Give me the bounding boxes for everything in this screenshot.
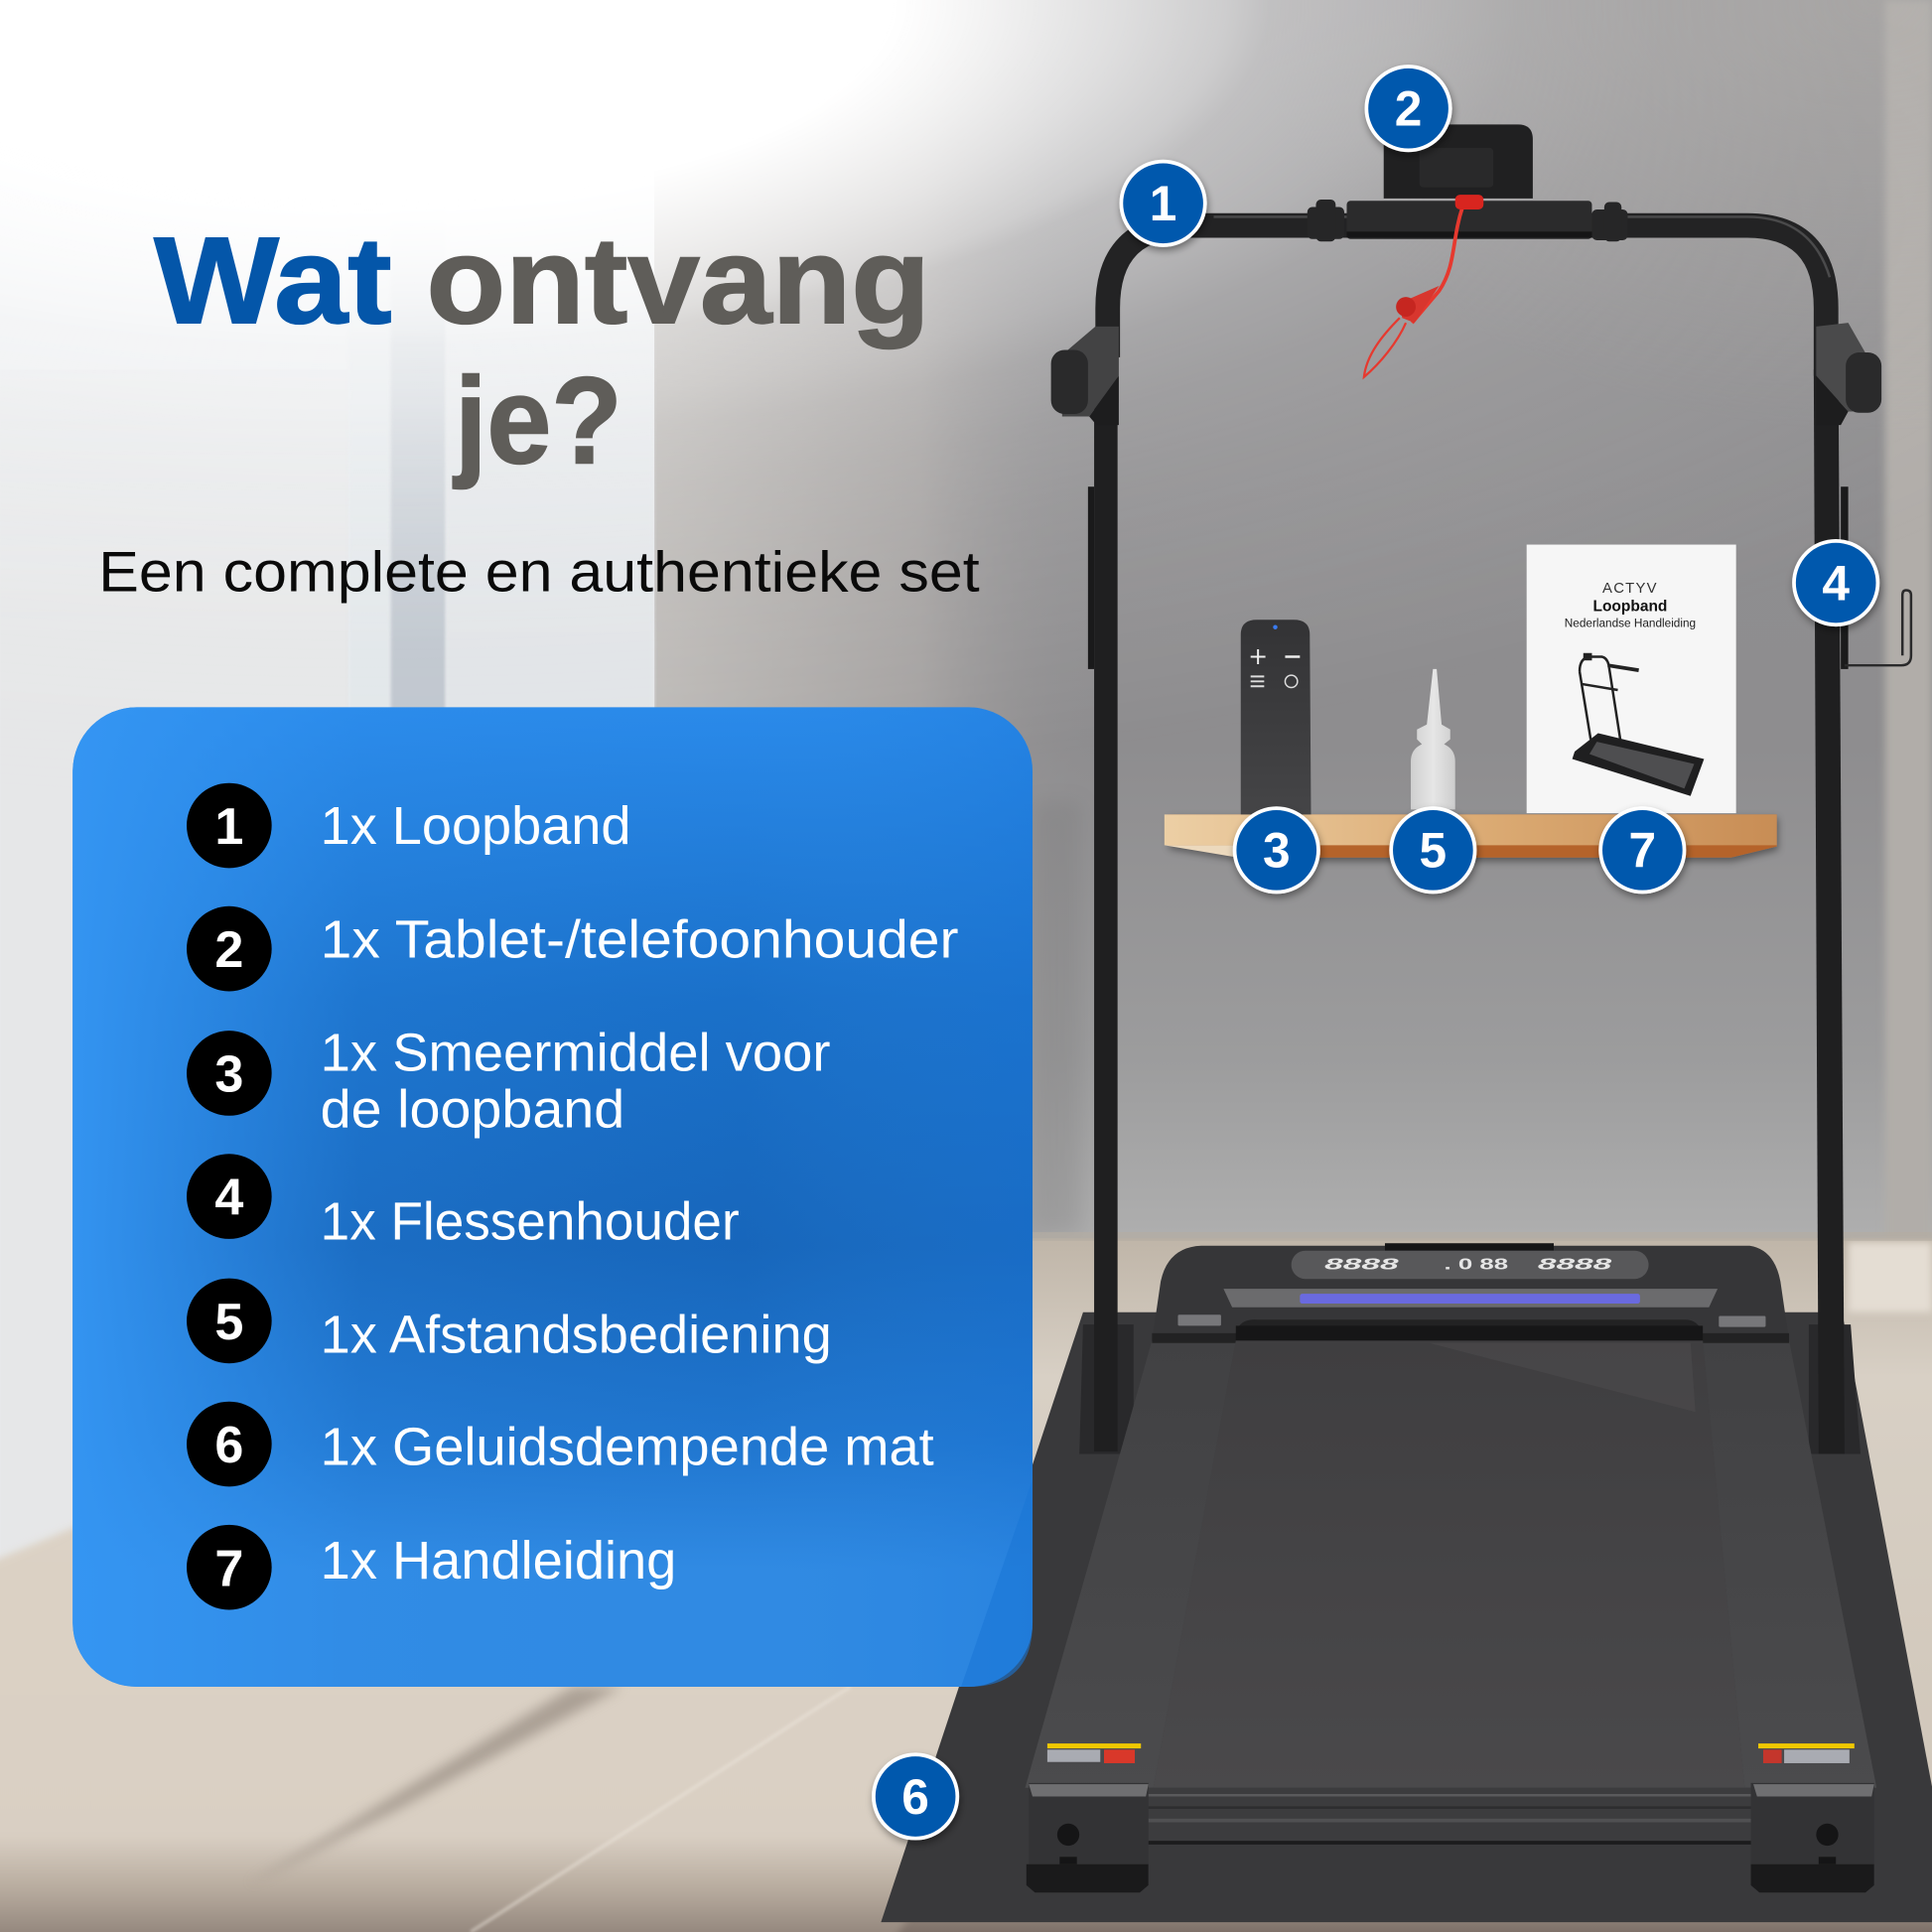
callout marker 5: 5 [1420,823,1447,879]
right rail [1703,1340,1876,1788]
callout marker 7: 7 [1629,823,1656,879]
callout marker 3: 3 [1263,823,1291,879]
base housings of uprights [1079,1324,1134,1453]
callout marker 6 [874,1754,957,1839]
rear roller [1149,1788,1752,1845]
list item 1 [187,783,630,868]
rubber noise-dampening mat [881,1312,1932,1922]
Dutch manual booklet: ACTYV [1602,581,1658,597]
left side grip [1051,327,1119,425]
right side grip [1816,323,1881,425]
callout marker 2 [1366,67,1450,150]
list item 7: 7 [214,1540,243,1597]
list item 3: de loopband [321,1081,624,1140]
list item 2 [187,906,959,991]
panel: contents list [72,707,1033,1687]
mini treadmill image [1573,653,1704,796]
list item 5: 5 [214,1294,243,1351]
list item 6: 6 [214,1417,243,1474]
subtitle: Een complete en authentieke set [98,541,980,605]
list item 2: 2 [214,921,243,979]
bar clamps [1308,207,1344,239]
callout marker 4 [1794,541,1877,624]
wooden shelf [1165,814,1777,858]
callout marker 4: 4 [1822,555,1850,611]
left end cap [1027,1783,1149,1892]
treadmill deck [1026,1243,1876,1892]
display pill with readouts: . 0 88 [1445,1255,1508,1273]
bottle holder [1845,590,1911,665]
list item 4: 4 [214,1170,243,1227]
purple LED bar [1300,1294,1640,1304]
console buttons [1177,1314,1765,1327]
list item 6 [187,1402,934,1486]
list item 4: 1x Flessenhouder [321,1193,740,1252]
list item 5 [187,1279,832,1365]
grey console band [1223,1289,1718,1308]
console [1152,1246,1789,1340]
list item 2: 1x Tablet-/telefoonhouder [321,910,959,969]
list item 4 [187,1154,740,1252]
top bar [1108,225,1826,376]
right upright [1814,369,1845,1453]
Dutch manual booklet: Nederlandse Handleiding [1565,618,1696,630]
list item 7 [187,1525,676,1609]
list item 3: 3 [214,1046,243,1104]
list item 3 [187,1024,830,1140]
list item 6: 1x Geluidsdempende mat [321,1419,934,1477]
remote control [1241,620,1311,814]
floor right of the panel [879,1238,1932,1932]
tablet and phone holder [1384,124,1533,199]
list item 1: 1x Loopband [321,797,630,856]
left warning label [1047,1743,1141,1763]
right end cap [1751,1783,1874,1892]
list item 7: 1x Handleiding [321,1532,676,1590]
callout marker 1: 1 [1150,176,1176,231]
Dutch manual booklet [1527,545,1736,813]
title: ontvang [426,212,930,349]
right warning label [1758,1743,1855,1763]
display pill with readouts: 8888 [1324,1255,1399,1273]
list item 5: 1x Afstandsbediening [321,1307,832,1365]
list item 3: 1x Smeermiddel voor [321,1024,830,1082]
lubricant bottle [1411,669,1455,809]
red safety key [1364,195,1483,377]
callout marker 7 [1600,808,1685,893]
Dutch manual booklet: Loopband [1592,599,1667,616]
treadmill frame with handlebar [1051,124,1881,1453]
running belt [1154,1340,1744,1788]
display slot [1385,1243,1554,1251]
callout marker 2: 2 [1395,81,1422,137]
callout marker 3 [1235,808,1318,893]
title: Wat [154,212,392,349]
title [154,212,930,490]
list item 1: 1 [214,798,243,856]
left rail [1026,1340,1236,1788]
title: je? [453,353,622,490]
callout marker 6: 6 [901,1769,929,1825]
display pill with readouts [1292,1251,1649,1279]
callout marker 5 [1391,808,1475,893]
left upright [1094,333,1118,1451]
display pill with readouts: 8888 [1538,1255,1611,1273]
callout marker 1 [1121,162,1205,245]
